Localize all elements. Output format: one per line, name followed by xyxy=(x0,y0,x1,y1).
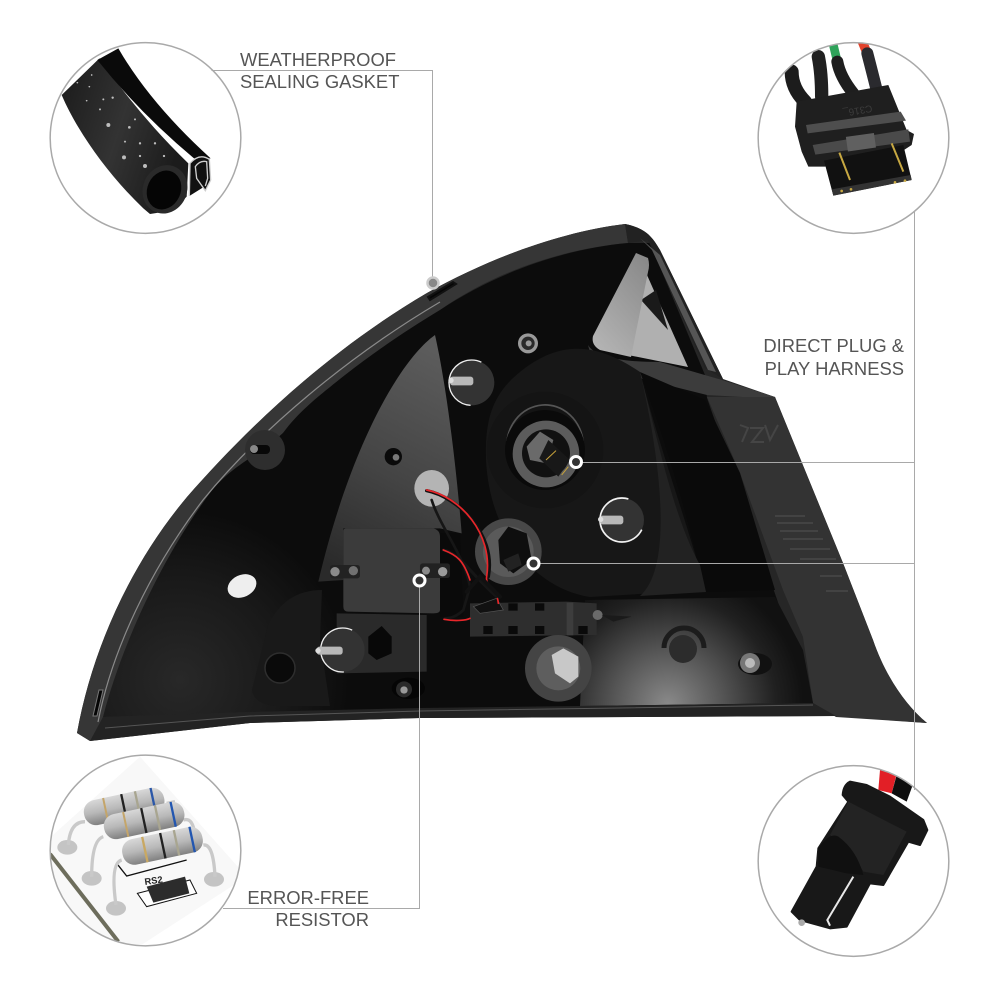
stud: lower left xyxy=(315,628,365,672)
callout circle: bulb connector xyxy=(758,766,949,956)
lamp outer housing xyxy=(77,224,927,741)
top slot xyxy=(428,282,456,300)
triangular panel xyxy=(318,335,462,582)
reflector bowl xyxy=(486,349,705,597)
callout circle: resistor xyxy=(49,754,242,947)
label: weatherproof sealing gasket: SEALING GASKET xyxy=(240,71,399,92)
circle outline xyxy=(758,43,949,233)
window glass xyxy=(628,275,688,367)
resistor box xyxy=(330,528,463,617)
top window frame xyxy=(625,224,723,379)
bulb contact xyxy=(827,877,853,926)
resistors xyxy=(84,788,164,826)
trace xyxy=(117,860,187,876)
second socket ring xyxy=(475,518,542,585)
stud: right xyxy=(598,498,644,542)
flange embossing xyxy=(775,515,848,592)
gasket U channel xyxy=(189,157,211,196)
lower chamber screw xyxy=(738,653,772,675)
chip label: RS2 xyxy=(144,875,163,887)
left knob xyxy=(245,430,285,470)
rim highlight xyxy=(98,302,440,722)
connector body xyxy=(795,85,914,167)
label: error-free resistor: ERROR-FREE xyxy=(247,887,369,908)
leader lines xyxy=(212,70,914,908)
callout circle: sealing gasket xyxy=(50,43,241,233)
stud: top xyxy=(448,360,494,405)
lower chamber hole xyxy=(664,628,704,663)
lower connector block xyxy=(470,598,632,637)
lamp rim band xyxy=(77,224,628,741)
circuit board xyxy=(40,757,247,957)
callout circle: harness plug xyxy=(758,40,949,233)
stud plate xyxy=(337,613,427,673)
small screw xyxy=(385,448,402,465)
marker dots xyxy=(414,278,582,586)
bottom socket xyxy=(525,635,592,702)
label: error-free resistor: RESISTOR xyxy=(275,909,369,930)
label: weatherproof sealing gasket: WEATHERPROOF xyxy=(240,49,396,70)
label: direct plug and play harness: DIRECT PLUG & xyxy=(763,335,904,356)
tail light assembly xyxy=(77,224,927,741)
chip xyxy=(147,877,189,903)
pads xyxy=(57,840,224,916)
gasket body xyxy=(62,58,188,214)
connector pins xyxy=(839,143,903,180)
rubber grommet xyxy=(414,470,449,507)
flange 12V mark xyxy=(740,425,778,442)
main socket ring xyxy=(487,392,603,508)
top screw xyxy=(518,333,538,353)
connector label: C316_ xyxy=(842,102,873,118)
right flange xyxy=(707,397,927,723)
gasket tube end xyxy=(145,166,188,214)
wiring xyxy=(427,490,500,620)
circle outline xyxy=(50,43,241,233)
harness wires xyxy=(792,40,877,102)
chip outline xyxy=(137,880,197,907)
gasket droplets xyxy=(76,74,165,168)
sticker xyxy=(224,570,260,602)
central detail xyxy=(315,333,644,702)
reflector fin xyxy=(593,253,649,357)
bulb socket xyxy=(792,782,927,928)
left slot xyxy=(93,690,103,716)
connector plug tip xyxy=(824,145,912,196)
label: direct plug and play harness: PLAY HARNESS xyxy=(765,358,904,379)
circle outline xyxy=(758,766,949,956)
bottom screw xyxy=(392,678,425,699)
left key xyxy=(368,626,392,660)
inner cavity xyxy=(103,243,813,717)
lower chamber xyxy=(580,597,813,706)
bulb wires xyxy=(878,770,897,793)
circle outline xyxy=(50,755,241,946)
lower left bump xyxy=(252,590,330,706)
resistor leads xyxy=(68,802,215,905)
